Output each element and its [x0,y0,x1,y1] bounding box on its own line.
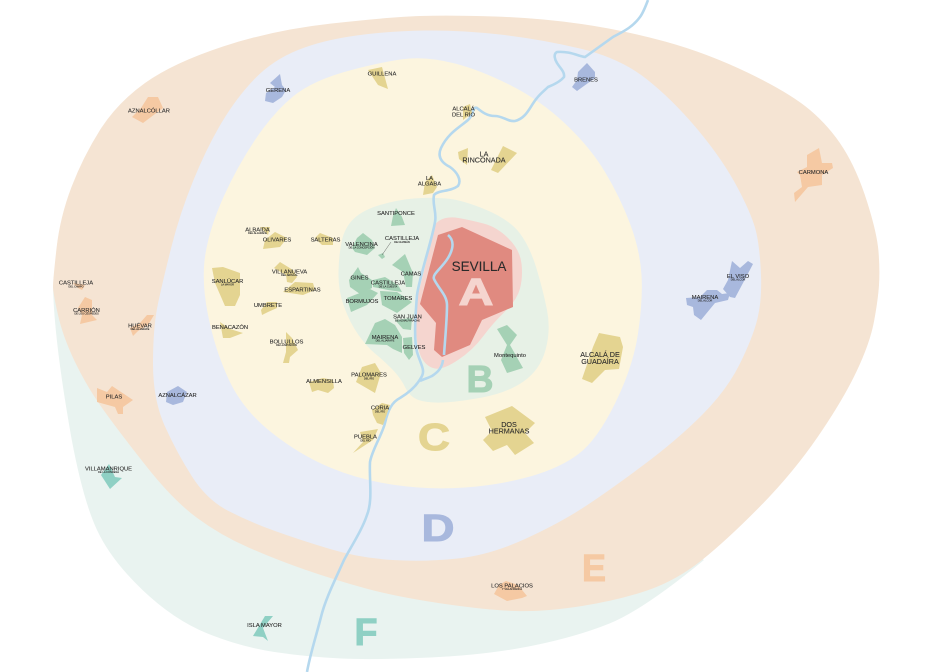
town: El Viso del Alcor: EL VISO [727,274,750,280]
town: Castilleja del Campo [59,280,93,290]
town: Umbrete: UMBRETE [254,303,282,309]
town: Alcalá del Río: DEL RÍO [452,112,475,118]
town: Valencina [345,233,378,255]
town: Gines: GINES [350,276,369,282]
town: La Algaba: LA [426,176,433,182]
town: Castilleja de Guzmán: DE GUZMÁN [394,240,410,244]
town: Alcalá de Guadaíra: GUADAÍRA [581,357,619,366]
town: Tomares [380,291,412,313]
zone E [53,16,879,611]
town: Mairena del Alcor [686,290,730,320]
town: San Juan de Aznalfarache [393,314,422,330]
town: Mairena del Aljarafe: DEL ALJARAFE [376,338,395,342]
town: Alcalá del Río [452,104,475,120]
town: Bormujos [346,289,379,312]
town: Isla Mayor: ISLA MAYOR [247,623,282,629]
town: Carrión de los Céspedes: DE LOS CÉSPEDES [74,310,99,316]
town: Puebla del Río [353,429,378,453]
town: San Juan de Aznalfarache: DE AZNALFARACHE [395,318,420,322]
town: Olivares: OLIVARES [263,238,291,244]
town: Alcalá de Guadaíra [580,333,623,383]
town: Brenes: BRENES [574,78,598,84]
town: La Rinconada: RINCONADA [462,156,506,164]
town: Valencina: DE LA CONCEPCIÓN [349,244,374,250]
town: Brenes [572,63,598,91]
town: Mairena del Aljarafe [365,319,402,353]
town: Aznalcóllar [128,97,170,123]
town: Villamanrique: VILLAMANRIQUE [85,466,132,472]
town: Aznalcóllar: AZNALCÓLLAR [128,108,170,114]
big letter F: F [354,612,378,654]
town: Almensilla: ALMENSILLA [306,379,342,385]
town: San Juan de Aznalfarache: SAN JUAN [393,314,422,320]
town: La Algaba: ALGABA [418,182,441,188]
town: Espartinas [283,282,321,295]
big letter E: E [582,548,606,590]
town: Olivares [263,232,291,249]
big letter C: C [418,417,450,459]
town: Dos Hermanas: DOS [501,420,517,429]
town: Mairena del Alcor: MAIRENA [692,295,718,301]
town: Benacazón [212,322,248,338]
town: Castilleja de Guzmán: CASTILLEJA [385,236,419,242]
town: Camas: CAMAS [401,272,421,278]
town: Huévar: DEL ALJARAFE [131,327,150,331]
town: Carrión de los Céspedes [73,297,100,324]
town: Gerena: GERENA [266,88,290,94]
label: Sevilla: SEVILLA [452,259,506,274]
zone F [53,286,704,659]
town: La Rinconada [458,146,517,173]
town: Dos Hermanas: HERMANAS [489,426,530,436]
zone B [338,198,549,403]
town: Coria del Río: DEL RÍO [375,410,385,414]
town: Gelves: GELVES [403,345,426,351]
town: Castilleja del Campo: CASTILLEJA [59,280,93,286]
town: Villanueva del Ariscal: DEL ARISCAL [281,273,298,277]
town: El Viso del Alcor [723,261,753,298]
big letter D: D [422,508,454,550]
town: Puebla del Río: DEL RÍO [360,438,371,442]
town: Mairena del Alcor: DEL ALCOR [698,298,712,302]
town: Castilleja de Guzmán [378,236,419,259]
town: Coria del Río: CORIA [371,406,389,412]
town: El Viso del Alcor: DEL ALCOR [731,278,745,282]
town: Isla Mayor [247,616,282,641]
town: Benacazón: BENACAZÓN [212,324,248,331]
town: Guillena: GUILLENA [368,72,396,78]
zone D [153,30,761,561]
zone A: Sevilla city [420,227,513,357]
town: Montequinto: Montequinto [494,353,526,359]
town: Alcalá del Río: ALCALÁ [452,106,475,112]
town: Carmona: CARMONA [799,170,828,176]
town: Sanlúcar la Mayor [212,267,243,306]
town: Pilas: PILAS [106,394,122,400]
town: Coria del Río [371,403,390,425]
town: La Rinconada: LA [480,150,489,158]
zone C [204,58,642,488]
big letter B: B [466,359,494,401]
town: Villamanrique: DE LA CONDESA [98,470,119,474]
town: Castilleja de la Cuesta: CASTILLEJA [371,280,405,286]
town: Villanueva del Ariscal: VILLANUEVA [272,270,307,276]
town: Gelves [403,337,426,360]
town: Sanlúcar la Mayor: LA MAYOR [221,282,234,286]
town: Camas [392,254,421,287]
town: Pilas [97,386,133,414]
town: Villamanrique [85,464,132,489]
town: Bollullos de la Mitación [270,332,304,363]
town: Montequinto [494,325,526,373]
town: Palomares del Río [351,363,387,393]
town: Castilleja de la Cuesta [371,277,405,292]
town: Albaida: DEL ALJARAFE [248,231,267,235]
town: Palomares del Río: PALOMARES [351,372,387,378]
town: Salteras [311,233,341,245]
town: Los Palacios: LOS PALACIOS [491,584,533,590]
town: Almensilla [306,378,342,393]
town: Mairena del Aljarafe: MAIRENA [372,335,398,341]
river canal branch [420,235,452,381]
town: Bollullos de la Mitación: BOLLULLOS [270,340,304,346]
town: Carrión de los Céspedes: CARRIÓN [73,307,100,314]
town: Villanueva del Ariscal [272,262,307,283]
town: Gerena [265,74,290,103]
zone A halo [416,217,522,369]
town: Guillena [368,67,396,89]
town: Dos Hermanas [483,406,535,455]
town: Espartinas: ESPARTINAS [284,288,321,294]
big letter A: A [458,272,494,314]
town: Aznalcázar [158,386,197,405]
town: La Algaba [418,175,441,195]
town: Alcalá de Guadaíra: ALCALÁ DE [580,350,620,359]
town: Los Palacios [491,581,533,601]
town: Los Palacios: Y VILLAFRANCA [502,587,522,591]
town: Umbrete [254,302,282,315]
town: Aznalcázar: AZNALCÁZAR [158,392,197,399]
town: Bormujos: BORMUJOS [346,299,379,305]
town: Salteras: SALTERAS [311,238,341,244]
town: Huévar: HUÉVAR [128,322,152,330]
town: Gines [349,267,372,294]
town: Carmona [794,148,833,202]
town: Santiponce [377,208,415,226]
town: Castilleja de la Cuesta: DE LA CUESTA [379,284,397,288]
town: Puebla del Río: PUEBLA [354,434,377,440]
town: Huévar [128,315,154,336]
town: Sanlúcar la Mayor: SANLÚCAR [212,278,243,285]
river Guadalquivir [307,0,648,672]
town: Santiponce: SANTIPONCE [377,211,415,217]
town: Albaida: ALBAIDA [245,228,270,234]
town: Bollullos de la Mitación: DE LA MITACIÓN [276,342,297,347]
town: Castilleja del Campo: DEL CAMPO [68,284,84,288]
town: Palomares del Río: DEL RÍO [364,376,374,380]
town: Tomares: TOMARES [384,296,412,302]
town: Valencina: VALENCINA [345,242,378,248]
